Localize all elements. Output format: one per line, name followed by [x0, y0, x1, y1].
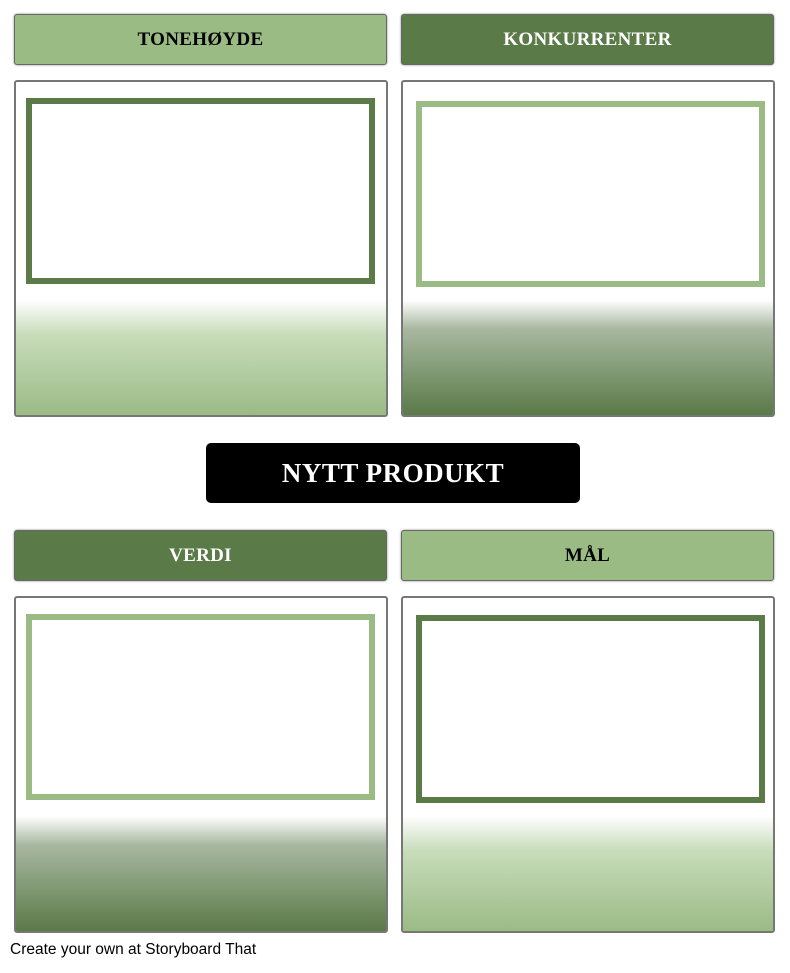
panel: mål: [401, 596, 775, 933]
gradient: [403, 300, 773, 415]
frame: [26, 614, 375, 800]
frame: [26, 98, 375, 284]
center title: nytt produkt: [206, 443, 580, 503]
panel: verdi: [14, 596, 388, 933]
footer text: Create your own at Storyboard That: [10, 941, 256, 958]
header: verdi: VERDI: [169, 544, 232, 566]
panel: konkurrenter: [401, 80, 775, 417]
center title: nytt produkt: NYTT PRODUKT: [282, 458, 504, 488]
header: tonehøyde: [14, 14, 387, 65]
header: tonehøyde: TONEHØYDE: [138, 28, 263, 50]
panel: tonehøyde: [14, 80, 388, 417]
gradient: [16, 300, 386, 415]
header: konkurrenter: [401, 14, 774, 65]
header: verdi: [14, 530, 387, 581]
gradient: [16, 816, 386, 931]
header: mål: [401, 530, 774, 581]
frame: [416, 615, 765, 803]
header: mål: MÅL: [565, 544, 610, 566]
header: konkurrenter: KONKURRENTER: [503, 28, 672, 50]
gradient: [403, 816, 773, 931]
frame: [416, 101, 765, 287]
